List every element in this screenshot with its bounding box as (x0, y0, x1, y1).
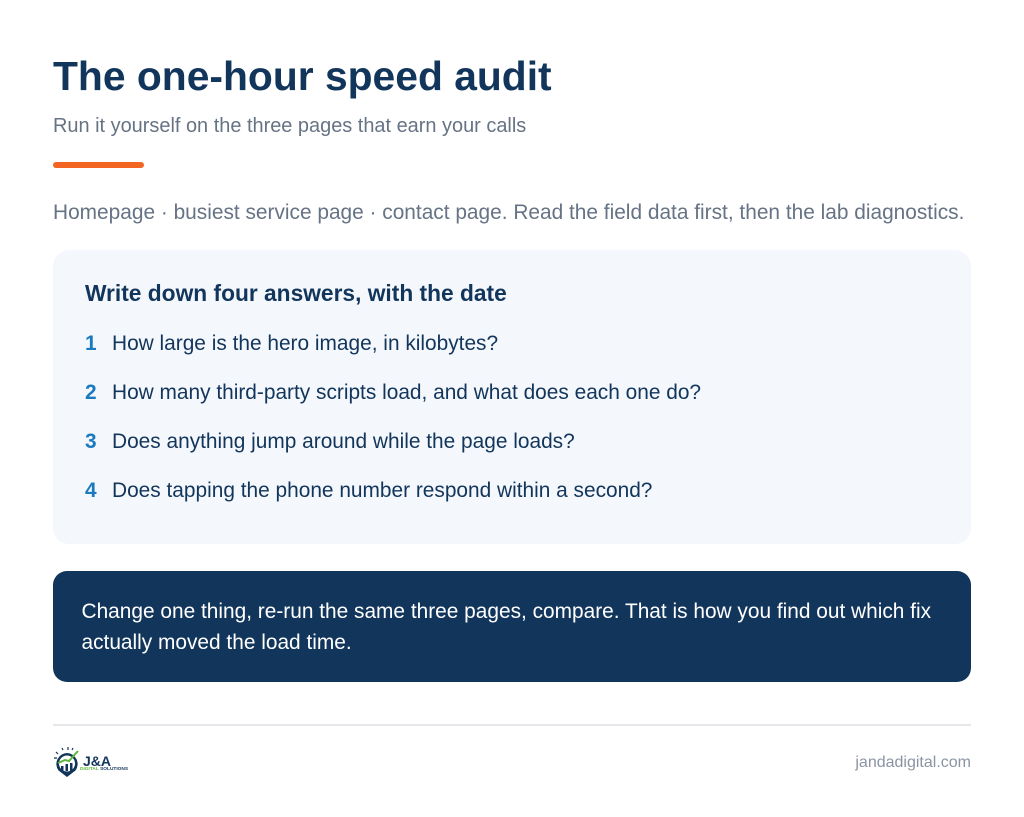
callout text: actually moved the load time. (82, 631, 352, 654)
orange accent bar (53, 162, 144, 168)
footer divider (53, 724, 971, 726)
question 1: 1 (85, 332, 97, 355)
question 1: How large is the hero image, in kilobytes? (112, 332, 498, 355)
question 4: Does tapping the phone number respond within a second? (112, 479, 652, 502)
question 2: 2 (85, 381, 97, 404)
website url: jandadigital.com (855, 754, 971, 771)
question 3: 3 (85, 430, 97, 453)
panel heading: Write down four answers, with the date (85, 280, 507, 306)
title: The one-hour speed audit (53, 53, 552, 99)
subtitle: Run it yourself on the three pages that earn your calls (53, 115, 526, 137)
callout text (82, 600, 931, 654)
callout (53, 571, 971, 682)
icon: logo pin (54, 747, 79, 777)
logo name: J&A (83, 753, 111, 769)
question 4: 4 (85, 479, 97, 502)
question 3: Does anything jump around while the page loads? (112, 430, 575, 453)
logo (54, 747, 128, 777)
logo tagline: DIGITAL SOLUTIONS (80, 767, 128, 772)
question 2: How many third-party scripts load, and what does each one do? (112, 381, 701, 404)
panel: four answers (53, 250, 971, 544)
intro text: Homepage · busiest service page · contact page. Read the field data first, then the lab diagnostics. (53, 201, 964, 224)
callout text: Change one thing, re-run the same three pages, compare. That is how you find out which fix (82, 600, 931, 623)
